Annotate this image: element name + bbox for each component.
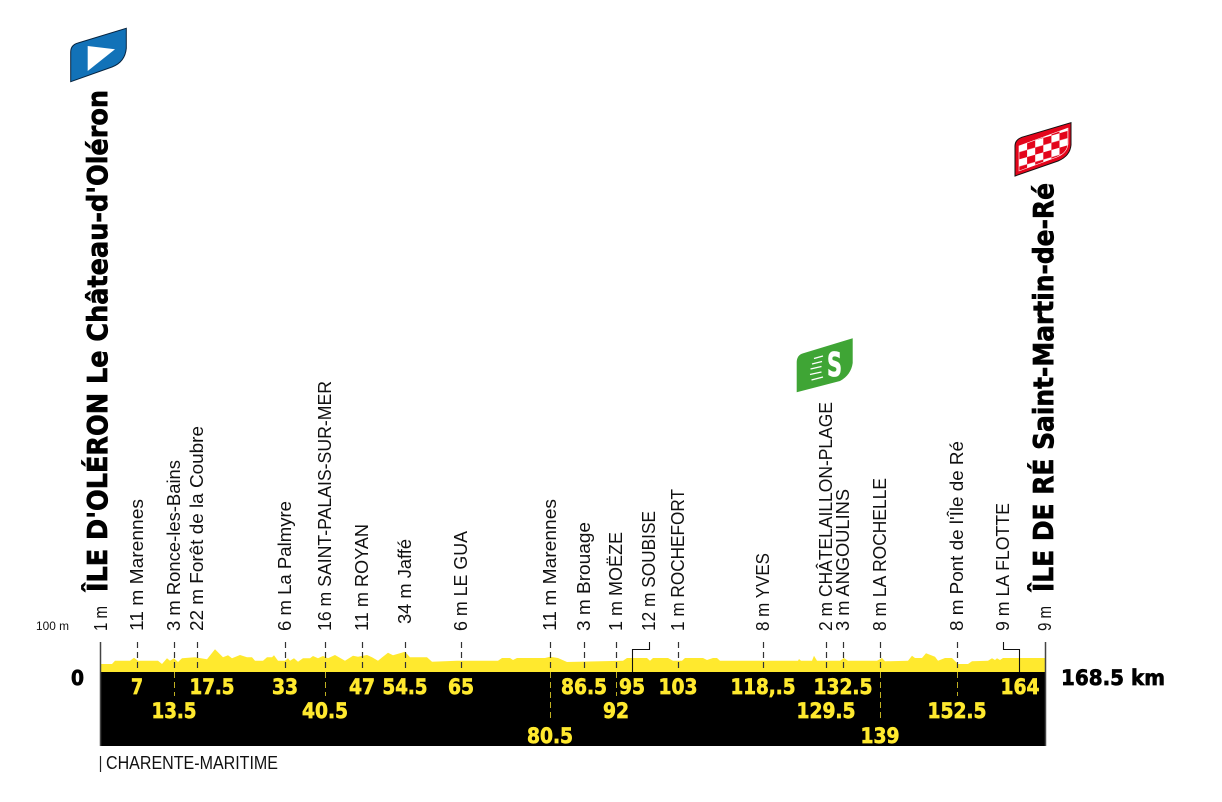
distance markers: 129.5 bbox=[796, 699, 856, 724]
location labels: 11 m ROYAN bbox=[351, 524, 372, 631]
location labels: 3 m Brouage bbox=[573, 522, 594, 631]
location labels: 9 m LA FLOTTE bbox=[992, 503, 1013, 631]
location labels: 16 m SAINT-PALAIS-SUR-MER bbox=[314, 381, 335, 631]
distance markers: 54.5 bbox=[382, 675, 428, 700]
location labels: 6 m La Palmyre bbox=[274, 501, 295, 631]
location labels: 1 m ROCHEFORT bbox=[667, 489, 688, 631]
department label: CHARENTE-MARITIME bbox=[106, 753, 278, 773]
distance markers: 95 bbox=[619, 675, 645, 700]
distance markers: 65 bbox=[448, 675, 474, 700]
location labels: 1 m bbox=[90, 606, 111, 631]
elevation profile bbox=[101, 649, 1045, 672]
distance markers: 7 bbox=[131, 675, 143, 700]
finish title: ÎLE DE RÉ Saint-Martin-de-Ré bbox=[1026, 183, 1060, 592]
location labels: 34 m Jaffé bbox=[394, 539, 415, 624]
scale label: 100 m: 100 m bbox=[36, 619, 69, 633]
location labels: 3 m ANGOULINS bbox=[832, 489, 853, 631]
location labels: 9 m bbox=[1034, 606, 1055, 631]
distance markers: 80.5 bbox=[527, 724, 573, 749]
icon: sprint flag: S bbox=[827, 345, 842, 384]
distance markers: 47 bbox=[349, 675, 375, 700]
black distance band bbox=[100, 672, 1046, 746]
icon: finish flag bbox=[1015, 123, 1071, 176]
distance markers: 40.5 bbox=[302, 699, 348, 724]
distance markers: 33 bbox=[272, 675, 298, 700]
location labels: 2 m CHÂTELAILLON-PLAGE bbox=[815, 402, 836, 631]
distance markers: 118,.5 bbox=[730, 675, 796, 700]
location labels: 8 m LA ROCHELLE bbox=[869, 478, 890, 631]
location marker lines bbox=[138, 642, 1020, 718]
distance markers: 164 bbox=[1000, 675, 1040, 700]
location labels: 11 m Marennes bbox=[126, 499, 147, 631]
start title: ÎLE D'OLÉRON Le Château-d'Oléron bbox=[80, 90, 114, 592]
distance markers: 132.5 bbox=[814, 675, 872, 700]
distance markers: 103 bbox=[658, 675, 698, 700]
location labels: 8 m Pont de l'Île de Ré bbox=[946, 441, 967, 631]
location labels: 22 m Forêt de la Coubre bbox=[186, 426, 207, 631]
scale label: 0: 0 bbox=[71, 666, 84, 690]
distance markers: 17.5 bbox=[190, 675, 234, 700]
distance markers bbox=[131, 675, 1040, 749]
profile axes bbox=[100, 642, 1046, 746]
icon: sprint flag bbox=[797, 338, 853, 392]
distance markers: 92 bbox=[603, 699, 629, 724]
distance markers: 152.5 bbox=[928, 699, 986, 724]
total distance: 168.5 km bbox=[1061, 666, 1165, 691]
location labels: 3 m Ronce-les-Bains bbox=[163, 460, 184, 631]
location labels: 1 m MOËZE bbox=[605, 532, 626, 631]
location labels bbox=[90, 381, 1055, 631]
location labels: 6 m LE GUA bbox=[450, 530, 471, 631]
location labels: 8 m YVES bbox=[752, 553, 773, 631]
location labels: 12 m SOUBISE bbox=[638, 511, 659, 631]
icon: start flag bbox=[71, 28, 126, 82]
distance markers: 139 bbox=[860, 724, 900, 749]
distance markers: 86.5 bbox=[561, 675, 607, 700]
distance markers: 13.5 bbox=[152, 699, 196, 724]
location labels: 11 m Marennes bbox=[539, 499, 560, 631]
